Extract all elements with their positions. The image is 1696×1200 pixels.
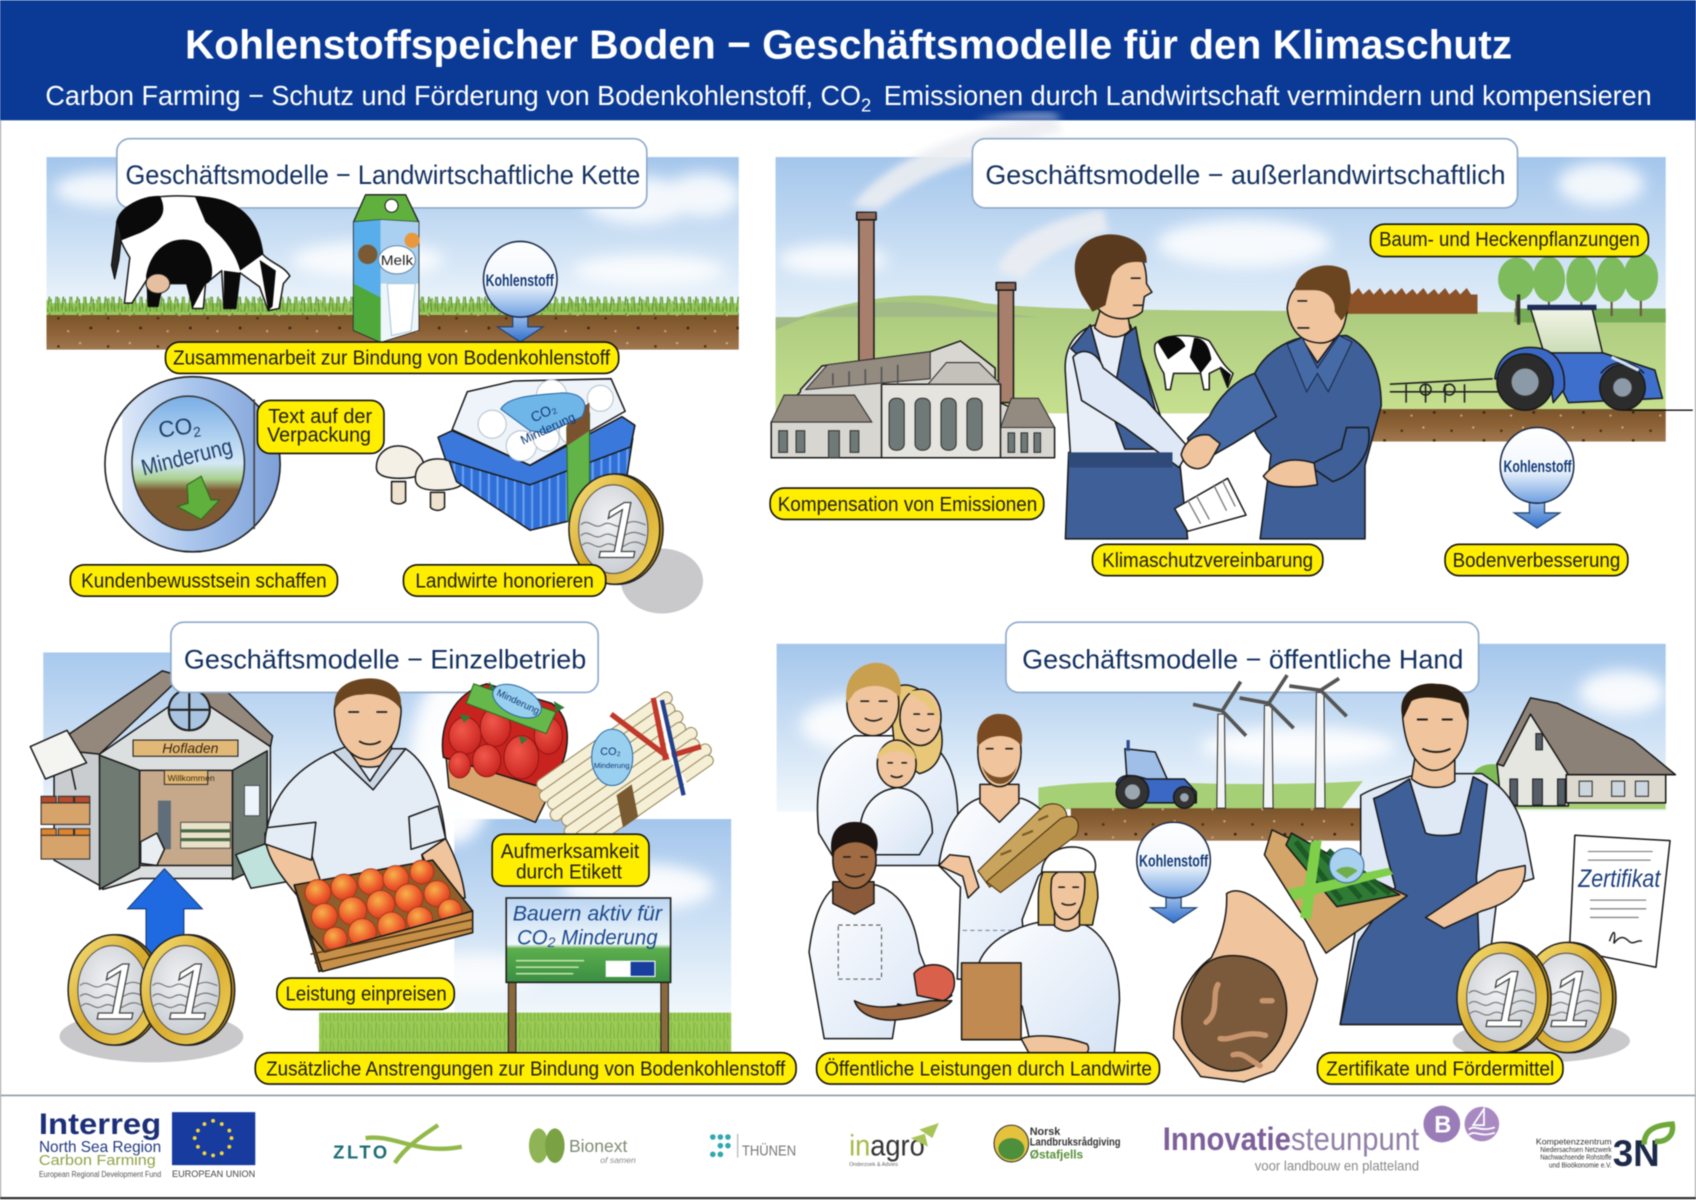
label: Text auf der Verpackung: Text auf der (268, 405, 372, 428)
logo: ZLTO: ZLTO (333, 1142, 387, 1163)
landscape background (777, 644, 1666, 841)
landscape background (776, 157, 1693, 442)
icon: baker (939, 714, 1078, 979)
logo: Interreg: North Sea Region (39, 1139, 161, 1156)
panel: Einzelbetrieb (30, 622, 796, 1084)
icon: factory (771, 341, 1055, 458)
icon: strawberry basket: Minderung (495, 688, 541, 717)
logo: EU flag (172, 1112, 255, 1179)
label: Klimaschutzvereinbarung: Klimaschutzvereinbarung (1102, 549, 1313, 572)
logo: 3N: und Bioökonomie e.V. (1549, 1160, 1612, 1169)
label: Öffentliche Leistungen: Öffentliche Leistungen durch Landwirte (824, 1057, 1152, 1080)
smoke over header (973, 113, 1062, 120)
logo: Bionext (529, 1128, 636, 1165)
label: Bodenverbesserung: Bodenverbesserung (1453, 549, 1620, 572)
heading (117, 139, 647, 208)
label: Zertifikate und Fördermittel (1317, 1053, 1563, 1084)
icon: certificate: Zertifikat (1577, 865, 1661, 893)
icon: two coins (59, 935, 243, 1062)
label: Baum- und Heckenpflanzungen (1370, 224, 1648, 257)
logo: Innovatiesteunpunt: B (1434, 1112, 1451, 1139)
vegetable box (1264, 830, 1407, 953)
logo: Interreg: European Regional Development Fund (39, 1170, 161, 1179)
logo: EU flag: EUROPEAN UNION (172, 1169, 255, 1179)
label: Zusammenarbeit (165, 342, 619, 373)
heading: Geschäftsmodelle − außerlandwirtschaftlich (985, 160, 1506, 190)
left man (1065, 234, 1190, 539)
icon: farm shop: Hofladen (162, 740, 219, 756)
logo: ZLTO (333, 1125, 462, 1163)
subtitle: Carbon Farming − Schutz und Förderung von Bodenkohlenstoff, CO (45, 80, 861, 111)
logo: Interreg: Carbon Farming (39, 1152, 156, 1169)
logo: 3N: Kompetenzzentrum (1536, 1138, 1612, 1147)
crate of peaches (294, 860, 473, 972)
logo: Innovatiesteunpunt (1163, 1106, 1499, 1174)
label: Bodenverbesserung (1445, 544, 1628, 576)
heading (171, 622, 598, 692)
icon: mushroom box: Minderung (518, 410, 578, 447)
logo: 3N (1536, 1124, 1673, 1174)
icon: packaging lens: CO (157, 412, 194, 443)
icon: smoke (852, 114, 1109, 279)
header band (0, 0, 1696, 120)
logo: Norsk Landbruksrådgiving (994, 1125, 1121, 1162)
heading: Geschäftsmodelle − Landwirtschaftliche Kette (125, 160, 640, 190)
heading: Geschäftsmodelle − Einzelbetrieb (184, 645, 586, 675)
icon: mushrooms (376, 446, 464, 510)
icon: two coins: 1 (1484, 955, 1529, 1044)
icon: certificate (1569, 835, 1670, 967)
label: Zusammenarbeit: Zusammenarbeit zur Bindung von Bodenkohlenstoff (173, 347, 610, 370)
icon: packaging lens (105, 377, 280, 552)
logo: Thünen (710, 1134, 796, 1159)
label: Klimaschutzvereinbarung (1092, 544, 1323, 576)
label: Öffentliche Leistungen (817, 1053, 1160, 1084)
icon: information sign: Bauern aktiv für (513, 901, 663, 926)
logo: inagro: Onderzoek & Advies (849, 1162, 898, 1168)
logo: Innovatiesteunpunt: voor landbouw en platteland (1255, 1158, 1419, 1174)
heading (972, 139, 1518, 208)
logo: Thünen: THÜNEN (742, 1141, 796, 1159)
icon: packaging lens: Minderung (138, 433, 235, 480)
icon: upward blue arrow (128, 869, 202, 963)
icon: wind turbines (1193, 675, 1347, 808)
icon: asparagus bundle: CO₂ (600, 746, 621, 758)
icon: mushroom box: CO₂ (528, 400, 559, 425)
label: Aufmerksamkeit durch Etikett (492, 834, 649, 886)
label: Leistung einpreisen (277, 978, 454, 1009)
icon: asparagus bundle: Minderung (594, 761, 630, 770)
label: Zertifikate und Fördermittel: Zertifikate und Fördermittel (1326, 1057, 1554, 1080)
icon: blue tractor (1116, 740, 1196, 808)
icon: hands holding soil (1174, 891, 1317, 1082)
icon: carbon arrow: Kohlenstoff (486, 272, 554, 290)
icon: farmer with vegetable box (1264, 684, 1534, 1025)
panel: öffentliche Hand (777, 622, 1675, 1084)
label: Kompensation von Emissionen (770, 488, 1044, 519)
icon: strawberry basket (442, 677, 567, 822)
label: Landwirte honorieren (403, 565, 606, 596)
label: Kundenbewusstsein schaffen: Kundenbewusstsein schaffen (81, 570, 327, 593)
label: Baum- und Heckenpflanzungen: Baum- und Heckenpflanzungen (1379, 228, 1640, 251)
label: Landwirte honorieren: Landwirte honorieren (415, 570, 594, 593)
logo: Innovatiesteunpunt: Innovatiesteunpunt (1163, 1121, 1419, 1157)
icon: small cow (1155, 336, 1233, 390)
icon: information sign: CO₂ Minderung (517, 925, 658, 950)
logo: Bionext: of samen (600, 1155, 636, 1165)
footer logos (0, 1095, 1696, 1179)
icon: asparagus bundle (529, 689, 719, 858)
label: Text auf der Verpackung: Verpackung (267, 424, 371, 447)
subtitle (45, 80, 1652, 116)
panel: außerlandwirtschaftlich (770, 114, 1693, 576)
icon: carbon arrow (483, 241, 557, 342)
right man (1181, 265, 1381, 539)
label: Leistung einpreisen: Leistung einpreisen (286, 983, 447, 1006)
logo: Norsk Landbruksrådgiving: Landbruksrådgiving (1030, 1137, 1121, 1149)
icon: two coins: 1 (95, 947, 140, 1036)
logo: inagro: inagro (849, 1130, 925, 1162)
icon: milk carton: Melk (381, 252, 414, 268)
icon: carbon arrow (1137, 822, 1210, 923)
icon: farmer with peaches (265, 678, 473, 972)
logo: Interreg: Interreg (39, 1109, 161, 1141)
logo: Norsk Landbruksrådgiving: Østafjells (1030, 1148, 1084, 1162)
contract paper (1175, 478, 1246, 531)
icon: coin: 1 (597, 485, 642, 574)
icon: mushroom box (438, 379, 635, 530)
label: Kundenbewusstsein schaffen (70, 565, 337, 596)
icon: house (1469, 698, 1675, 806)
icon: information sign (506, 898, 671, 1053)
landscape background (43, 652, 731, 1052)
label: Zusätzliche Anstrengungen: Zusätzliche Anstrengungen zur Bindung von Bodenkohlenstoff (266, 1057, 786, 1080)
icon: farm shop: Willkommen (168, 773, 215, 783)
logo: Bionext: Bionext (569, 1136, 628, 1156)
icon: milk carton (354, 195, 420, 342)
logo: 3N: 3N (1613, 1133, 1660, 1174)
icon: carbon arrow (1500, 427, 1574, 528)
icon: carbon arrow: Kohlenstoff (1503, 458, 1572, 476)
logo: 3N: Nachwachsende Rohstoffe (1540, 1153, 1612, 1162)
icon: plough (1390, 379, 1498, 403)
icon: hedge and trees (1341, 253, 1666, 323)
subtitle: Emissionen durch Landwirtschaft vermindern und kompensieren (884, 80, 1652, 111)
icon: packaging lens: 2 (192, 423, 202, 440)
icon: two men shaking hands (1065, 234, 1381, 539)
icon: blue tractor (1495, 294, 1662, 410)
icon: two coins: 1 (168, 947, 212, 1036)
panel: Landwirtschaftliche Kette (47, 139, 741, 614)
label: Aufmerksamkeit durch Etikett: durch Etikett (516, 861, 622, 884)
icon: butcher (809, 822, 954, 1039)
icon: family (817, 663, 958, 866)
title: Kohlenstoffspeicher Boden − Geschäftsmodelle für den Klimaschutz (185, 22, 1512, 68)
logo: 3N: Niedersachsen Netzwerk (1540, 1145, 1612, 1154)
label: Aufmerksamkeit durch Etikett: Aufmerksamkeit (501, 840, 640, 863)
icon: cow (111, 196, 290, 311)
subtitle: 2 (861, 95, 871, 116)
icon: two coins (1453, 942, 1630, 1062)
logo: Norsk Landbruksrådgiving: Norsk (1030, 1126, 1061, 1138)
icon: farm shop (30, 671, 287, 889)
icon: two coins: 1 (1549, 955, 1593, 1044)
icon: chimneys (857, 212, 1016, 403)
landscape background (47, 157, 741, 350)
logo: inagro (849, 1123, 939, 1168)
label: Kompensation von Emissionen: Kompensation von Emissionen (778, 493, 1037, 516)
label: Text auf der Verpackung (257, 400, 384, 453)
icon: woman in cap with box (962, 847, 1119, 1060)
heading (1006, 622, 1479, 692)
icon: carbon arrow: Kohlenstoff (1139, 853, 1209, 871)
heading: Geschäftsmodelle − öffentliche Hand (1022, 645, 1463, 675)
icon: coin (569, 474, 703, 614)
logo: Interreg (39, 1109, 161, 1179)
label: Zusätzliche Anstrengungen (255, 1053, 796, 1084)
